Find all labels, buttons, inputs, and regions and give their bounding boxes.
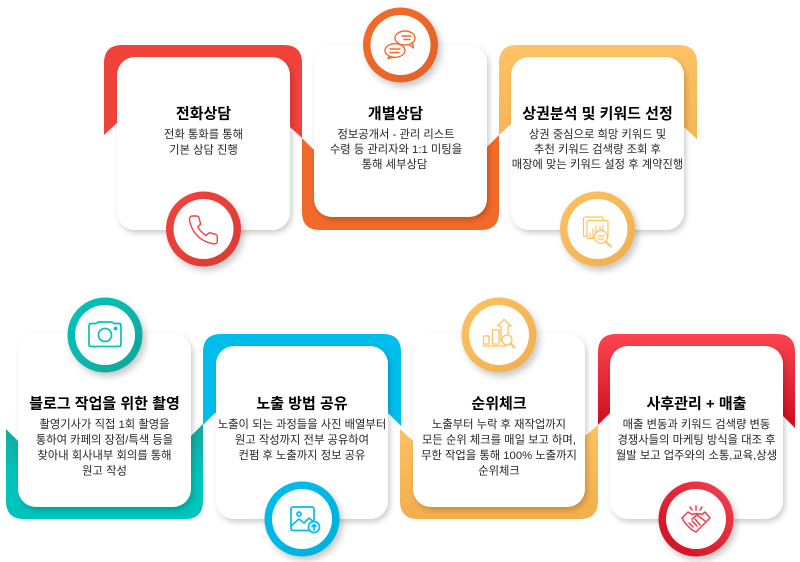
- card: 블로그 작업을 위한 촬영: 촬영기사가 직접 1회 촬영을: [39, 418, 170, 431]
- card: 블로그 작업을 위한 촬영: 찾아내 회사내부 회의를 통해: [37, 449, 172, 462]
- card: 상권분석 및 키워드 선정: 매장에 맞는 키워드 설정 후 계약진행: [512, 157, 683, 171]
- icon: camera: [68, 298, 142, 372]
- card: 개별상담: 개별상담: [368, 106, 423, 122]
- card: 노출 방법 공유: [203, 334, 401, 519]
- icon: keyword chart with magnifier: [560, 192, 635, 266]
- card: 상권분석 및 키워드 선정: 상권분석 및 키워드 선정: [522, 106, 673, 122]
- card: 노출 방법 공유: 노출 방법 공유: [256, 396, 348, 412]
- card: 노출 방법 공유: 노출이 되는 과정들을 사진 배열부터: [218, 418, 386, 431]
- card: 사후관리 + 매출: 월발 보고 업주와의 소통,교육,상생: [616, 449, 777, 462]
- card: 개별상담: 수령 등 관리자와 1:1 미팅을: [330, 143, 462, 156]
- icon: rank chart: [462, 298, 536, 372]
- card: 노출 방법 공유: 컨펌 후 노출까지 정보 공유: [239, 449, 365, 462]
- card: 사후관리 + 매출: [598, 334, 795, 519]
- card: 개별상담: 정보공개서 - 관리 리스트: [337, 128, 455, 141]
- card: 블로그 작업을 위한 촬영: 블로그 작업을 위한 촬영: [29, 396, 180, 412]
- icon: handshake: [658, 482, 734, 556]
- card: 블로그 작업을 위한 촬영: 통하여 카페의 장점/특색 등을: [36, 432, 173, 446]
- card: 상권분석 및 키워드 선정: [499, 45, 697, 230]
- card: 순위체크: 모든 순위 체크를 매일 보고 하며,: [422, 432, 576, 446]
- card: 순위체크: [400, 333, 598, 519]
- card: 블로그 작업을 위한 촬영: [6, 333, 203, 519]
- card: 전화상담: 기본 상담 진행: [169, 144, 238, 156]
- card: 순위체크: 무한 작업을 통해 100% 노출까지: [421, 449, 577, 462]
- card: 블로그 작업을 위한 촬영: 원고 작성: [82, 464, 127, 478]
- icon: speech bubbles: [363, 8, 438, 82]
- card: 전화상담: [104, 45, 302, 230]
- card: 노출 방법 공유: 원고 작성까지 전부 공유하여: [235, 432, 369, 446]
- card: 전화상담: 전화 통화를 통해: [164, 128, 243, 141]
- card: 순위체크: 순위체크: [471, 396, 527, 412]
- icon: phone: [166, 192, 241, 266]
- icon: image upload: [264, 482, 340, 556]
- card: 상권분석 및 키워드 선정: 추천 키워드 검색량 조회 후: [534, 142, 661, 156]
- card: 사후관리 + 매출: 사후관리 + 매출: [647, 396, 747, 412]
- card: 개별상담: [302, 45, 499, 230]
- card: 개별상담: 통해 세부상담: [362, 158, 427, 171]
- card: 사후관리 + 매출: 매출 변동과 키워드 검색량 변동: [623, 418, 770, 431]
- card: 사후관리 + 매출: 경쟁사들의 마케팅 방식을 대조 후: [617, 432, 776, 446]
- card: 순위체크: 순위체크: [478, 464, 520, 478]
- card: 상권분석 및 키워드 선정: 상권 중심으로 희망 키워드 및: [529, 128, 666, 141]
- card: 순위체크: 노출부터 누락 후 재작업까지: [432, 418, 566, 431]
- card: 전화상담: 전화상담: [176, 106, 231, 122]
